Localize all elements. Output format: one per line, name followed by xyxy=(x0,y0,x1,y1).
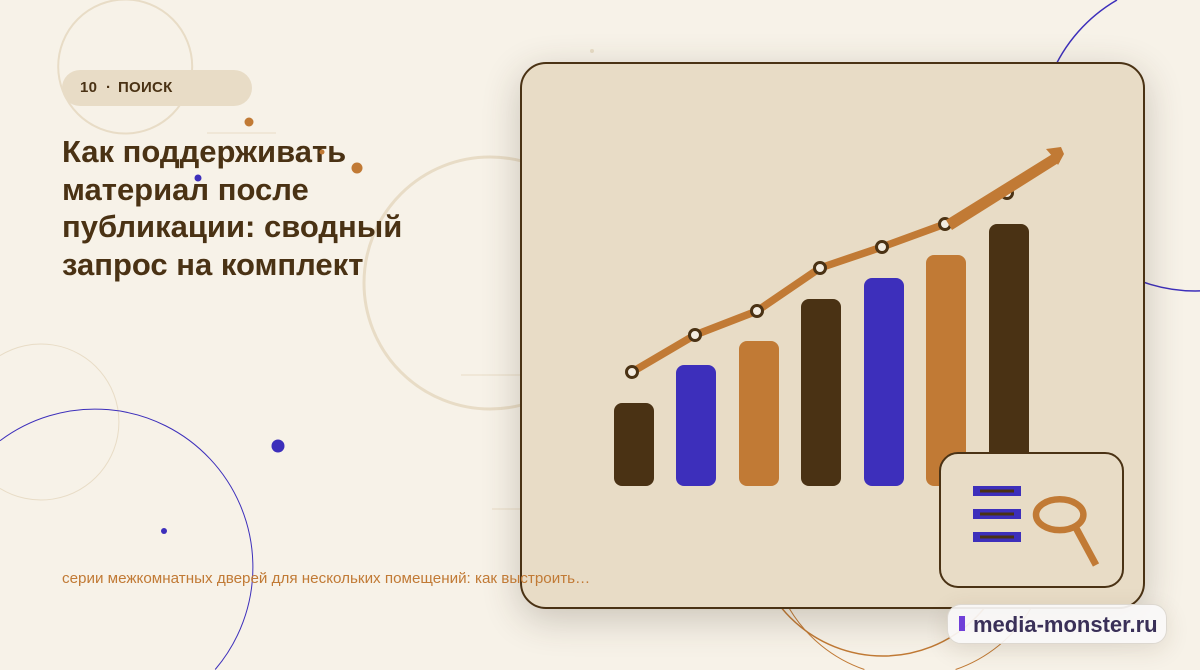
title: публикации: сводный xyxy=(62,209,402,244)
bar 2 xyxy=(676,365,716,486)
title: запрос на комплект xyxy=(62,247,363,282)
panel: search inset xyxy=(939,452,1124,588)
category pill xyxy=(62,70,252,106)
bar 3 xyxy=(739,341,779,486)
category pill: 10 xyxy=(80,79,97,96)
icon: document lines xyxy=(973,486,1021,542)
category pill: · xyxy=(106,79,111,96)
bar 6 xyxy=(926,255,966,486)
trend line xyxy=(632,224,945,372)
category pill: ПОИСК xyxy=(118,79,172,96)
subtitle: серии межкомнатных дверей для нескольких помещений: как выстроить… xyxy=(62,570,590,587)
bar 7 xyxy=(989,224,1029,486)
brand badge xyxy=(947,604,1167,644)
brand badge: media-monster.ru xyxy=(973,612,1158,637)
title: Как поддерживать xyxy=(62,134,346,169)
line markers xyxy=(626,188,1012,378)
bar 5 xyxy=(864,278,904,486)
bar 4 xyxy=(801,299,841,486)
icon: magnifier xyxy=(1036,499,1096,565)
trend arrow xyxy=(946,147,1064,230)
title xyxy=(62,134,402,282)
panel: chart card xyxy=(520,62,1145,609)
title: материал после xyxy=(62,172,309,207)
bar 1 xyxy=(614,403,654,486)
